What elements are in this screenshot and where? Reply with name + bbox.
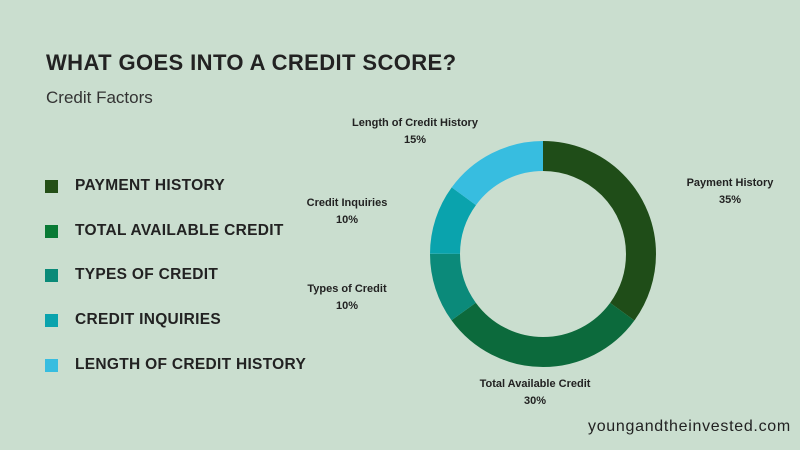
- label: length of credit history: [352, 117, 478, 146]
- title: WHAT GOES INTO A CREDIT SCORE?: [46, 50, 456, 75]
- label: payment history: [687, 177, 774, 206]
- legend: length of credit history: [45, 356, 306, 373]
- legend: CREDIT INQUIRIES: [75, 311, 221, 328]
- label: length of credit history: 15%: [404, 134, 426, 146]
- legend: [45, 177, 306, 373]
- label: payment history: Payment History: [687, 177, 773, 189]
- subtitle: Credit Factors: [46, 88, 153, 107]
- label: types of credit: [307, 283, 387, 312]
- legend: credit inquiries: [45, 311, 221, 328]
- label: payment history: 35%: [719, 194, 741, 206]
- label: total available credit: [480, 378, 590, 407]
- legend: types of credit: [45, 266, 218, 283]
- label: credit inquiries: Credit Inquiries: [307, 197, 387, 209]
- legend: TOTAL AVAILABLE CREDIT: [75, 222, 284, 239]
- legend: TYPES OF CREDIT: [75, 266, 218, 283]
- legend: total available credit: [45, 222, 284, 239]
- label: types of credit: Types of Credit: [307, 283, 387, 295]
- legend: PAYMENT HISTORY: [75, 177, 225, 194]
- legend: LENGTH OF CREDIT HISTORY: [75, 356, 306, 373]
- label: total available credit: 30%: [524, 395, 546, 407]
- label: total available credit: Total Available Credit: [480, 378, 590, 390]
- footer url: youngandtheinvested.com: [588, 418, 791, 435]
- label: types of credit: 10%: [336, 300, 358, 312]
- label: length of credit history: Length of Credit History: [352, 117, 478, 129]
- label: credit inquiries: [307, 197, 387, 226]
- legend: payment history: [45, 177, 225, 194]
- label: credit inquiries: 10%: [336, 214, 358, 226]
